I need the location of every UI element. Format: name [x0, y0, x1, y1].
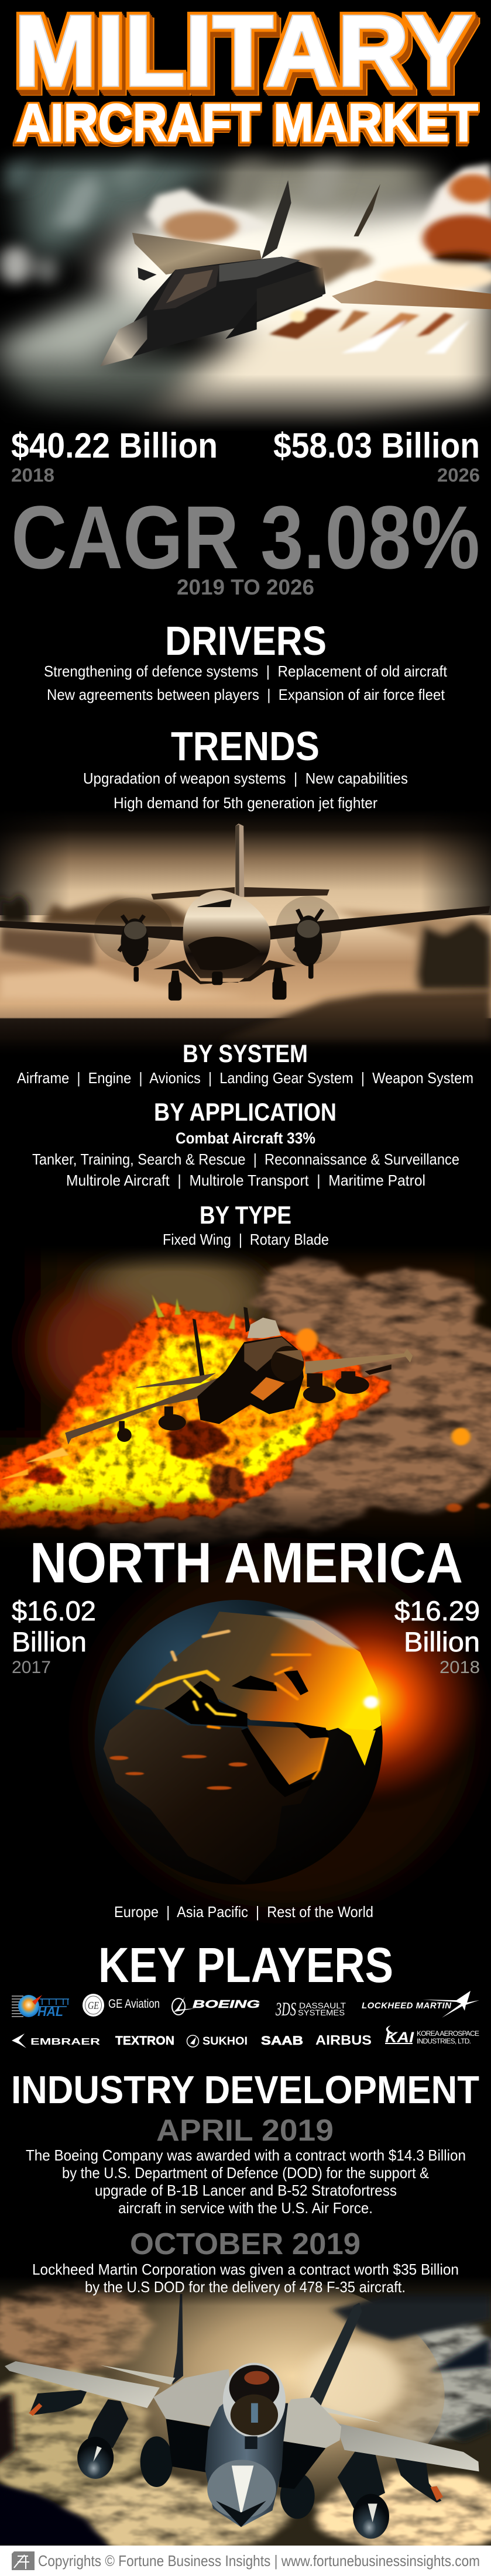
logo: KAI: KOREA AEROSPACE [417, 2029, 479, 2038]
logo: Boeing [172, 1997, 260, 2015]
logo: Boeing: BOEING [193, 1998, 260, 2010]
logo: Dassault Systemes: DASSAULT [299, 2001, 346, 2010]
ground texture [219, 990, 491, 1041]
jet canopy [153, 265, 219, 310]
panel: globe image [88, 1553, 491, 1908]
dark mountains [0, 2294, 491, 2551]
jet stores [117, 1365, 392, 1442]
clouds [0, 2282, 491, 2551]
value 2018: 2018 [440, 1658, 480, 1677]
value 2018: 2018 [11, 465, 54, 486]
by application list: Multirole Aircraft | Multirole Transport | Maritime Patrol [66, 1172, 425, 1189]
logo: Embraer [12, 2034, 101, 2048]
April 2019 text: aircraft in service with the U.S. Air Force. [118, 2199, 373, 2217]
panel: hero fighter jet image [0, 143, 491, 432]
logo: Airbus: AIRBUS [315, 2032, 372, 2048]
drivers list: New agreements between players | Expansion of air force fleet [47, 686, 445, 703]
treeline [0, 893, 491, 990]
by application list [32, 1150, 459, 1189]
sponsons [153, 960, 296, 984]
value 2018: Billion [404, 1626, 480, 1657]
value 2018: $40.22 Billion [11, 426, 218, 465]
logo: HAL [12, 1995, 69, 2019]
heading: trends: TRENDS [171, 723, 320, 769]
logo: Embraer: EMBRAER [30, 2037, 101, 2047]
jet tail fins [262, 180, 291, 259]
propeller discs [94, 896, 341, 965]
tailplanes [100, 2365, 176, 2385]
main wings [5, 2361, 160, 2408]
logo: Lockheed Martin: LOCKHEED MARTIN [362, 2001, 452, 2011]
logo: KAI: INDUSTRIES, LTD. [417, 2037, 471, 2045]
canopy [223, 2363, 286, 2438]
by type list: Fixed Wing | Rotary Blade [163, 1231, 329, 1248]
by system heading: BY SYSTEM [183, 1040, 308, 1068]
tail [235, 823, 244, 897]
engines [121, 919, 149, 966]
logo: SAAB: SAAB [261, 2034, 303, 2048]
smoke [94, 1260, 491, 1549]
drivers list: Strengthening of defence systems | Replacement of old aircraft [44, 662, 448, 680]
April 2019 text: by the U.S. Department of Defence (DOD) for the support & [62, 2164, 429, 2182]
by application heading: BY APPLICATION [154, 1098, 337, 1126]
value 2017: Billion [12, 1626, 87, 1657]
value 2018 [394, 1595, 480, 1677]
April 2019 text: The Boeing Company was awarded with a contract worth $14.3 Billion [26, 2146, 466, 2164]
value 2026 [273, 426, 480, 486]
earth sphere [95, 1600, 383, 1885]
logo: GE Aviation: GE [88, 2000, 99, 2011]
trends list [83, 770, 408, 812]
jet missiles and exhaust [269, 308, 469, 353]
logo: Textron: TEXTRON [115, 2034, 174, 2048]
side flame spots [296, 1328, 490, 1512]
October 2019 text [32, 2261, 459, 2296]
logo: Fortune Business Insights [12, 2551, 35, 2570]
smoke wisps [0, 153, 351, 284]
fuselage [183, 890, 270, 978]
continents [135, 1612, 382, 1766]
value 2026: $58.03 Billion [273, 426, 480, 465]
logo: Dassault Systemes: 3DS [275, 1999, 296, 2020]
value 2026: 2026 [437, 465, 480, 486]
flames [0, 1305, 392, 1529]
flame rays [0, 1294, 235, 1479]
jet wings [132, 233, 262, 274]
sun glow [241, 1589, 491, 1814]
landing gear [133, 963, 314, 1001]
nose [207, 2460, 276, 2518]
wings [0, 921, 183, 941]
value 2017: 2017 [12, 1658, 51, 1677]
October 2019 text: Lockheed Martin Corporation was given a contract worth $35 Billion [32, 2261, 459, 2278]
panel: front fighter jet image [0, 2275, 491, 2551]
windshield [197, 899, 232, 907]
logo: HAL: HAL [37, 2004, 63, 2019]
date: October 2019: OCTOBER 2019 [130, 2227, 360, 2261]
jet body [197, 1336, 304, 1424]
October 2019 text: by the U.S DOD for the delivery of 478 F-35 aircraft. [85, 2278, 406, 2296]
CAGR period: 2019 TO 2026 [177, 575, 314, 599]
by application list: Tanker, Training, Search & Rescue | Reconnaissance & Surveillance [32, 1150, 459, 1168]
jet fuselage [133, 256, 322, 357]
value 2018: $16.29 [394, 1595, 480, 1626]
drivers list [44, 662, 448, 703]
jet tail [193, 1318, 205, 1376]
panel: turboprop aircraft image [0, 810, 491, 1056]
logo: KAI [385, 2025, 479, 2046]
value 2018 [11, 426, 218, 486]
April 2019 text: upgrade of B-1B Lancer and B-52 Stratofortress [95, 2182, 397, 2199]
value 2017 [12, 1595, 96, 1677]
heading: key players: KEY PLAYERS [98, 1938, 393, 1993]
logo: KAI: KAI [385, 2029, 414, 2046]
trends list: Upgradation of weapon systems | New capabilities [83, 770, 408, 787]
sky glow [44, 2275, 445, 2516]
afterburner spark [290, 310, 306, 322]
by type heading: BY TYPE [200, 1201, 291, 1229]
other regions: Europe | Asia Pacific | Rest of the World [114, 1903, 373, 1921]
intakes [166, 2419, 210, 2472]
logo: Sukhoi: SUKHOI [202, 2035, 248, 2048]
missiles [30, 2389, 441, 2503]
logo: Dassault Systemes [275, 1999, 346, 2020]
logos: key players [12, 1991, 479, 2048]
pylons and tanks [77, 2399, 389, 2539]
logo: GE Aviation [83, 1994, 160, 2017]
April 2019 text [26, 2146, 466, 2217]
value 2017: $16.02 [12, 1595, 96, 1626]
combat share: Combat Aircraft 33% [176, 1129, 315, 1147]
logo: Lockheed Martin [362, 1991, 479, 2018]
trends list: High demand for 5th generation jet fighter [114, 794, 377, 812]
jet canopy [248, 1318, 281, 1338]
date: April 2019: APRIL 2019 [156, 2114, 334, 2148]
footer [0, 2546, 491, 2576]
heading: drivers: DRIVERS [165, 618, 327, 664]
glowing coastlines [138, 1632, 327, 1779]
panel: fighter in fire image [0, 1242, 491, 1550]
jet nose [100, 315, 147, 366]
far tail fins [172, 2294, 183, 2385]
logo: Dassault Systemes: SYSTEMES [298, 2008, 345, 2017]
night lights on Africa [109, 1755, 248, 1790]
fuselage [205, 2403, 288, 2527]
jet wings [65, 1374, 232, 1444]
logo: GE Aviation: GE Aviation [108, 1997, 160, 2011]
propeller blades [119, 909, 322, 954]
seas [164, 1670, 329, 1797]
inner wings [153, 2369, 232, 2427]
sun flare [363, 1696, 379, 1709]
